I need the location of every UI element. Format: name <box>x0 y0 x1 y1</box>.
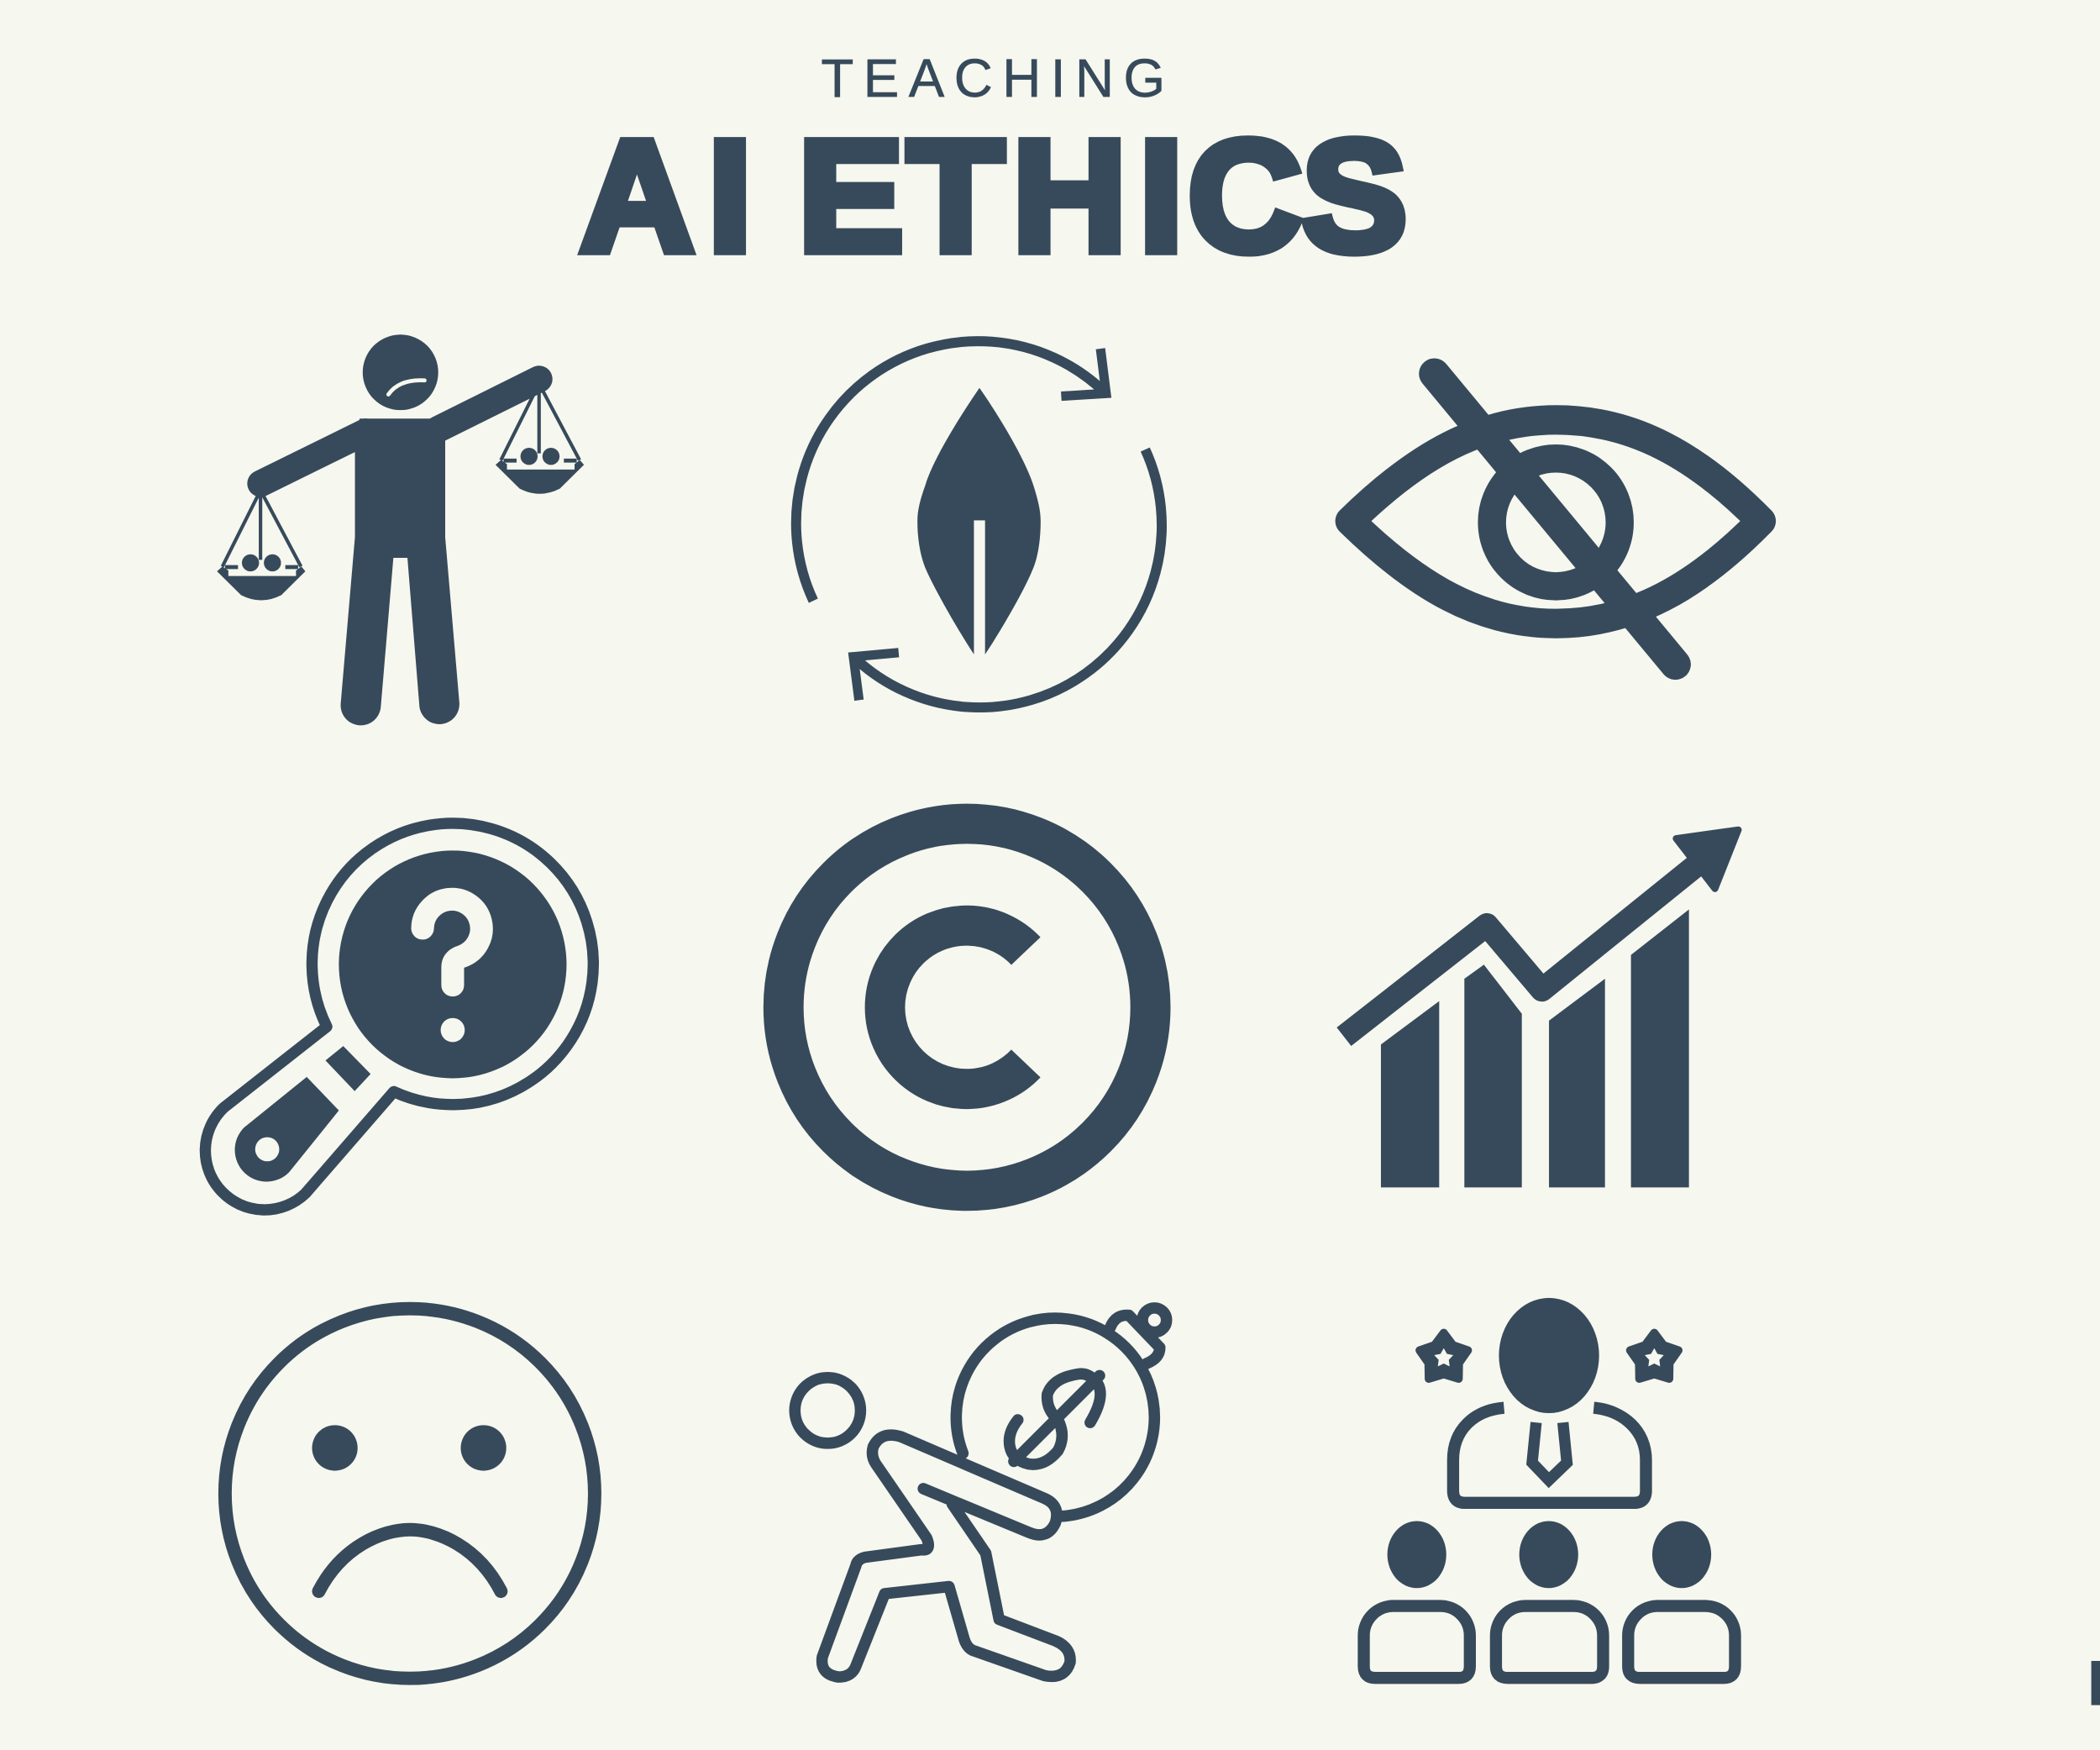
icon: magnifying glass with question mark (truth) <box>205 823 593 1210</box>
icon: sad face (wellbeing) <box>225 1309 595 1679</box>
icon: leader with stars above audience (power) <box>1364 1298 1735 1678</box>
icon: leaf in recycling arrows (sustainability) <box>796 341 1162 707</box>
icon: copyright symbol <box>784 824 1151 1190</box>
icon: rising bar chart with arrow (profit) <box>1344 830 1738 1187</box>
icon: person holding scales (bias) <box>217 334 584 725</box>
title block <box>580 48 1407 284</box>
icon: crossed out eye (transparency) <box>1350 374 1761 665</box>
cropped glyph fragment at right edge <box>2092 1661 2100 1705</box>
title: AI ETHICS: AI ETHICS <box>580 108 1407 284</box>
eyebrow: TEACHING: TEACHING <box>821 48 1165 108</box>
icon: person carrying money bomb (burden of cost) <box>795 1308 1167 1677</box>
